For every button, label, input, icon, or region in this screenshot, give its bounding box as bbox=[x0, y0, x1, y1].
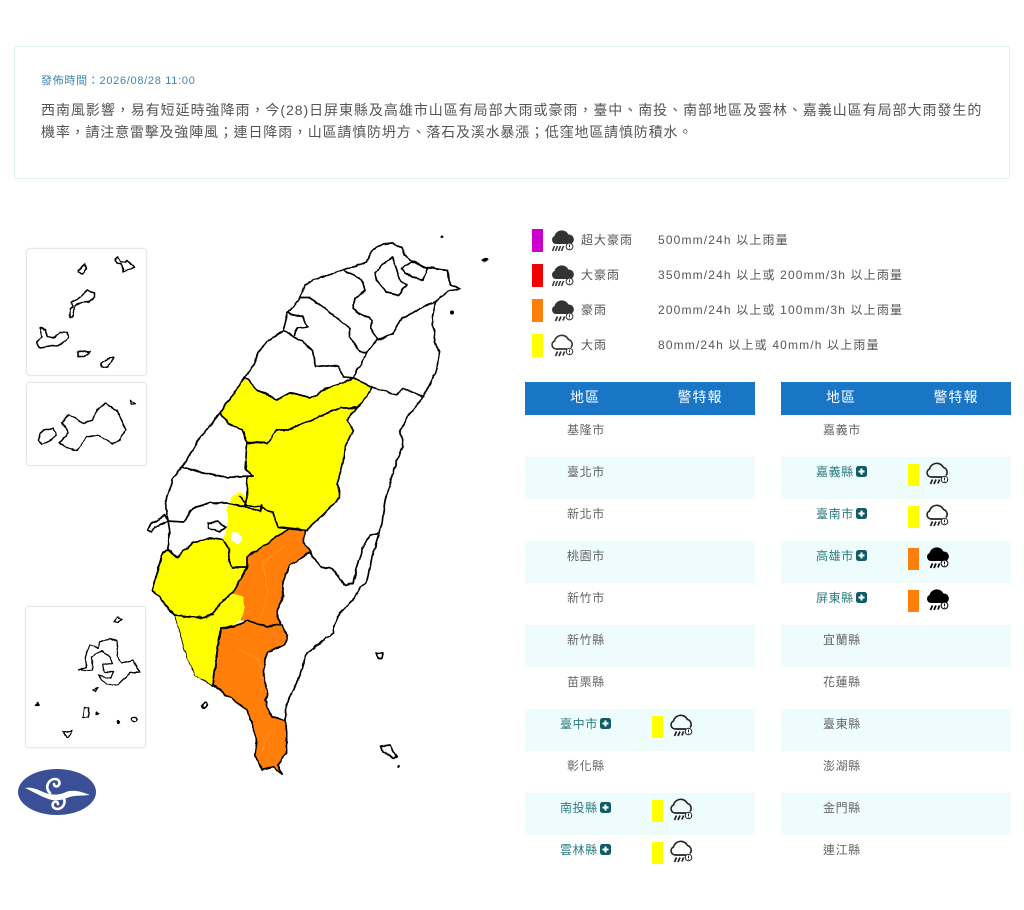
row: 高雄市 bbox=[781, 541, 1011, 583]
legend row: heavy rain bbox=[532, 334, 880, 357]
Taipei City bbox=[375, 257, 407, 295]
map: Taiwan rainfall warning map bbox=[18, 236, 488, 815]
row: 彰化縣: 彰化縣 bbox=[567, 759, 605, 773]
legend row: heavy rain: 80mm/24h 以上或 40mm/h 以上雨量 bbox=[658, 338, 880, 352]
inset map: Kinmen bbox=[38, 400, 136, 451]
legend row: extremely heavy rain bbox=[532, 299, 903, 322]
row: 雲林縣 bbox=[560, 840, 692, 864]
row: 臺北市: 臺北市 bbox=[567, 465, 605, 479]
legend row: extremely torrential rain: 500mm/24h 以上雨量 bbox=[658, 233, 789, 247]
row: 花蓮縣: 花蓮縣 bbox=[823, 675, 861, 689]
row: 臺東縣: 臺東縣 bbox=[823, 717, 861, 731]
row: 宜蘭縣: 宜蘭縣 bbox=[823, 633, 861, 647]
legend row: torrential rain: 350mm/24h 以上或 200mm/3h 以上雨量 bbox=[658, 268, 903, 282]
table header: 警特報 bbox=[678, 389, 722, 405]
legend row: extremely heavy rain: 豪雨 bbox=[581, 303, 607, 317]
row: 新北市: 新北市 bbox=[567, 507, 605, 521]
legend row: extremely torrential rain bbox=[532, 229, 789, 252]
legend row: heavy rain: 大雨 bbox=[581, 338, 607, 352]
Orchid Island bbox=[381, 745, 397, 758]
island outline bbox=[152, 243, 460, 774]
Keelung City bbox=[402, 262, 428, 280]
row: 桃園市: 桃園市 bbox=[567, 549, 605, 563]
row: 宜蘭縣 bbox=[781, 625, 1011, 667]
row: 臺南市 bbox=[816, 504, 948, 528]
row: 基隆市: 基隆市 bbox=[567, 423, 605, 437]
region: Chiayi mountain yellow bbox=[223, 492, 288, 567]
legend row: extremely heavy rain: 200mm/24h 以上或 100mm/3h 以上雨量 bbox=[658, 303, 903, 317]
Green Island bbox=[376, 653, 383, 659]
table header bbox=[781, 382, 1011, 415]
row: 嘉義縣 bbox=[781, 457, 1011, 499]
table: left regions bbox=[525, 382, 755, 864]
legend bbox=[532, 229, 903, 357]
row: 臺南市: 臺南市 bbox=[816, 507, 854, 521]
row: 金門縣: 金門縣 bbox=[823, 801, 861, 815]
row: 新竹縣 bbox=[525, 625, 755, 667]
region: Nantou yellow bbox=[245, 408, 357, 530]
Waisanding bbox=[147, 515, 168, 532]
region: Tainan yellow bbox=[152, 538, 247, 618]
logo: Central Weather Administration bbox=[18, 769, 96, 815]
legend row: torrential rain: 大豪雨 bbox=[581, 268, 620, 282]
row: 嘉義市: 嘉義市 bbox=[823, 423, 861, 437]
legend row: extremely torrential rain: 超大豪雨 bbox=[581, 233, 633, 247]
township lines bbox=[240, 545, 285, 750]
inset map: Matsu bbox=[37, 257, 134, 368]
issue time: 發佈時間：2026/08/28 11:00 bbox=[41, 75, 196, 87]
row: 金門縣 bbox=[781, 793, 1011, 835]
legend row: torrential rain bbox=[532, 264, 903, 287]
row: 連江縣: 連江縣 bbox=[823, 843, 861, 857]
panel: announcement bbox=[14, 46, 1010, 179]
county borders bbox=[175, 529, 310, 623]
announcement text: 西南風影響，易有短延時強降雨，今(28)日屏東縣及高雄市山區有局部大雨或豪雨，臺中、南投、南部地區及雲林、嘉義山區有局部大雨發生的 bbox=[41, 102, 982, 118]
announcement text bbox=[41, 102, 982, 140]
row: 臺北市 bbox=[525, 457, 755, 499]
inset panel: Matsu bbox=[26, 248, 147, 376]
Chiayi City bbox=[208, 521, 226, 532]
region: Taichung yellow bbox=[220, 377, 372, 443]
inset map: Penghu bbox=[35, 617, 140, 737]
region: Pingtung orange bbox=[213, 621, 288, 774]
row: 屏東縣 bbox=[816, 589, 949, 612]
row: 新竹縣: 新竹縣 bbox=[567, 633, 605, 647]
row: 嘉義縣: 嘉義縣 bbox=[816, 465, 854, 479]
row: 雲林縣: 雲林縣 bbox=[560, 843, 598, 857]
row: 南投縣 bbox=[525, 793, 755, 835]
row: 桃園市 bbox=[525, 541, 755, 583]
region: Chiayi gap bbox=[230, 532, 242, 544]
region: Kaohsiung orange bbox=[233, 530, 310, 627]
table header bbox=[525, 382, 755, 415]
row: 臺東縣 bbox=[781, 709, 1011, 751]
inset panel: Penghu bbox=[25, 606, 146, 748]
table header: 地區 bbox=[826, 389, 856, 405]
row: 臺中市: 臺中市 bbox=[560, 717, 598, 731]
table: right regions bbox=[781, 382, 1011, 857]
row: 高雄市: 高雄市 bbox=[816, 549, 854, 563]
row: 澎湖縣: 澎湖縣 bbox=[823, 759, 861, 773]
row: 臺中市 bbox=[525, 709, 755, 751]
table header: 地區 bbox=[570, 389, 600, 405]
table header: 警特報 bbox=[934, 389, 978, 405]
region: Kaohsiung west yellow bbox=[175, 594, 245, 685]
row: 南投縣: 南投縣 bbox=[560, 801, 598, 815]
row: 苗栗縣: 苗栗縣 bbox=[567, 675, 605, 689]
inset panel: Kinmen bbox=[26, 382, 147, 466]
row: 新竹市: 新竹市 bbox=[567, 591, 605, 605]
outlying dots bbox=[396, 236, 488, 768]
announcement text: 機率，請注意雷擊及強陣風；連日降雨，山區請慎防坍方、落石及溪水暴漲；低窪地區請慎防積水。 bbox=[41, 124, 693, 140]
Xiaoliuqiu bbox=[201, 701, 208, 709]
row: 屏東縣: 屏東縣 bbox=[816, 591, 854, 605]
